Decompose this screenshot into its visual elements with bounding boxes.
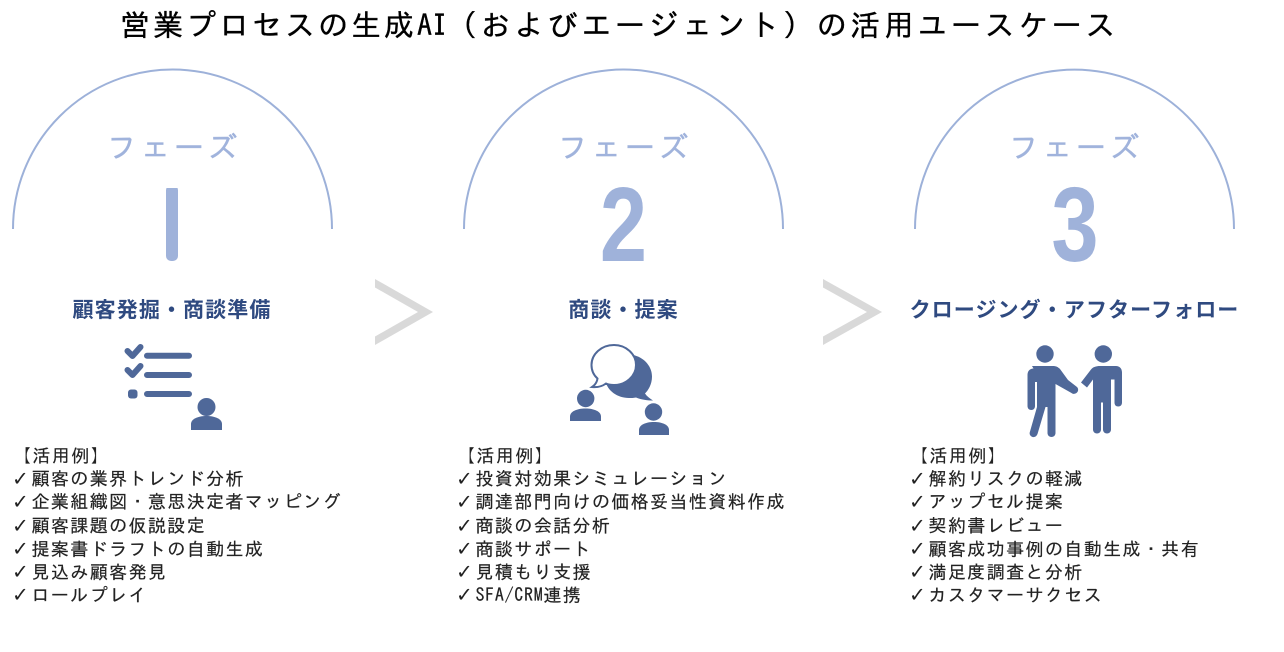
phase 2 arc	[464, 70, 783, 229]
phase 2 use-case list: ✓	[456, 582, 473, 606]
phase 3 use-case list: アップセル提案	[928, 492, 1064, 511]
phase 3 use-case list: ✓	[909, 466, 926, 490]
phase 3 arc	[915, 70, 1234, 229]
phase 3 use-case list: ✓	[909, 536, 926, 560]
phase 2 number: 2	[600, 166, 647, 284]
phase 3 use-case list: ✓	[909, 560, 926, 584]
phase 2 use-case list: ✓	[456, 514, 473, 538]
phase 3 use-case list: ✓	[909, 490, 926, 514]
phase 1 use-case list: ✓	[12, 514, 29, 538]
phase 1 heading: 顧客発掘・商談準備	[73, 299, 271, 322]
icon: two people shaking hands	[1028, 345, 1122, 437]
phase 2 use-case list: 投資対効果シミュレーション	[476, 469, 728, 488]
phase 1 use-case list: ✓	[12, 582, 29, 606]
phase 3 use-case list: 満足度調査と分析	[928, 562, 1084, 582]
phase 1 use-case list: ✓	[12, 490, 29, 514]
phase 1 label: フェーズ	[107, 132, 241, 162]
phase 2 use-case list: ✓	[456, 560, 473, 584]
phase 2 use-case list: 商談サポート	[476, 540, 592, 558]
phase 1 use-case list: ✓	[12, 466, 29, 490]
phase 2 use-case list	[456, 446, 786, 606]
phase 3 column	[909, 70, 1239, 606]
phase 1 column	[12, 70, 342, 607]
phase 2 heading: 商談・提案	[568, 299, 679, 322]
phase 3 label: フェーズ	[1009, 132, 1143, 162]
phase 2 use-case list: ✓	[456, 466, 473, 490]
phase 3 heading: クロージング・アフターフォロー	[910, 298, 1239, 322]
phase 2 use-case list: ✓	[456, 490, 473, 514]
phase 1 number: 1	[141, 166, 200, 284]
phase 1 use-case list: ロールプレイ	[32, 586, 148, 604]
icon: checklist with person	[128, 347, 222, 430]
phase 2 use-case list: 【活用例】	[457, 446, 554, 465]
phase 2 use-case list: 商談の会話分析	[476, 516, 611, 535]
phase 2 use-case list: 見積もり支援	[476, 562, 592, 582]
phase 1 use-case list: ✓	[12, 536, 29, 560]
phase 1 use-case list: 提案書ドラフトの自動生成	[32, 540, 264, 558]
phase 3 use-case list: 顧客成功事例の自動生成・共有	[928, 540, 1200, 558]
phase 3 use-case list: 解約リスクの軽減	[928, 469, 1084, 488]
phase 1 use-case list: 企業組織図・意思決定者マッピング	[32, 492, 342, 511]
title: 営業プロセスの生成AI（およびエージェント）の活用ユースケース	[120, 10, 1119, 40]
phase 1 use-case list: 【活用例】	[13, 446, 110, 465]
phase 3 use-case list: カスタマーサクセス	[928, 586, 1103, 604]
phase 1 use-case list: 見込み顧客発見	[32, 562, 167, 582]
phase 3 use-case list: 【活用例】	[910, 446, 1007, 465]
phase 1 use-case list: ✓	[12, 560, 29, 584]
phase 3 number: 3	[1051, 166, 1099, 284]
phase 2 label: フェーズ	[558, 132, 692, 162]
phase 3 use-case list: ✓	[909, 582, 926, 606]
phase 2 use-case list: 調達部門向けの価格妥当性資料作成	[476, 492, 786, 511]
phase 3 use-case list: 契約書レビュー	[928, 516, 1064, 535]
phase 1 use-case list	[12, 446, 342, 606]
phase 3 use-case list: ✓	[909, 514, 926, 538]
phase 1 use-case list: 顧客の業界トレンド分析	[32, 469, 245, 488]
phase 3 use-case list	[909, 446, 1200, 606]
arrow 2	[823, 279, 882, 345]
phase 1 use-case list: 顧客課題の仮説設定	[32, 516, 206, 535]
arrow 1	[375, 279, 433, 345]
icon: conversation	[570, 345, 669, 435]
phase 2 use-case list: ✓	[456, 536, 473, 560]
phase 2 column	[456, 70, 786, 606]
phase 1 arc	[13, 70, 332, 229]
phase 2 use-case list: SFA/CRM連携	[476, 586, 582, 604]
